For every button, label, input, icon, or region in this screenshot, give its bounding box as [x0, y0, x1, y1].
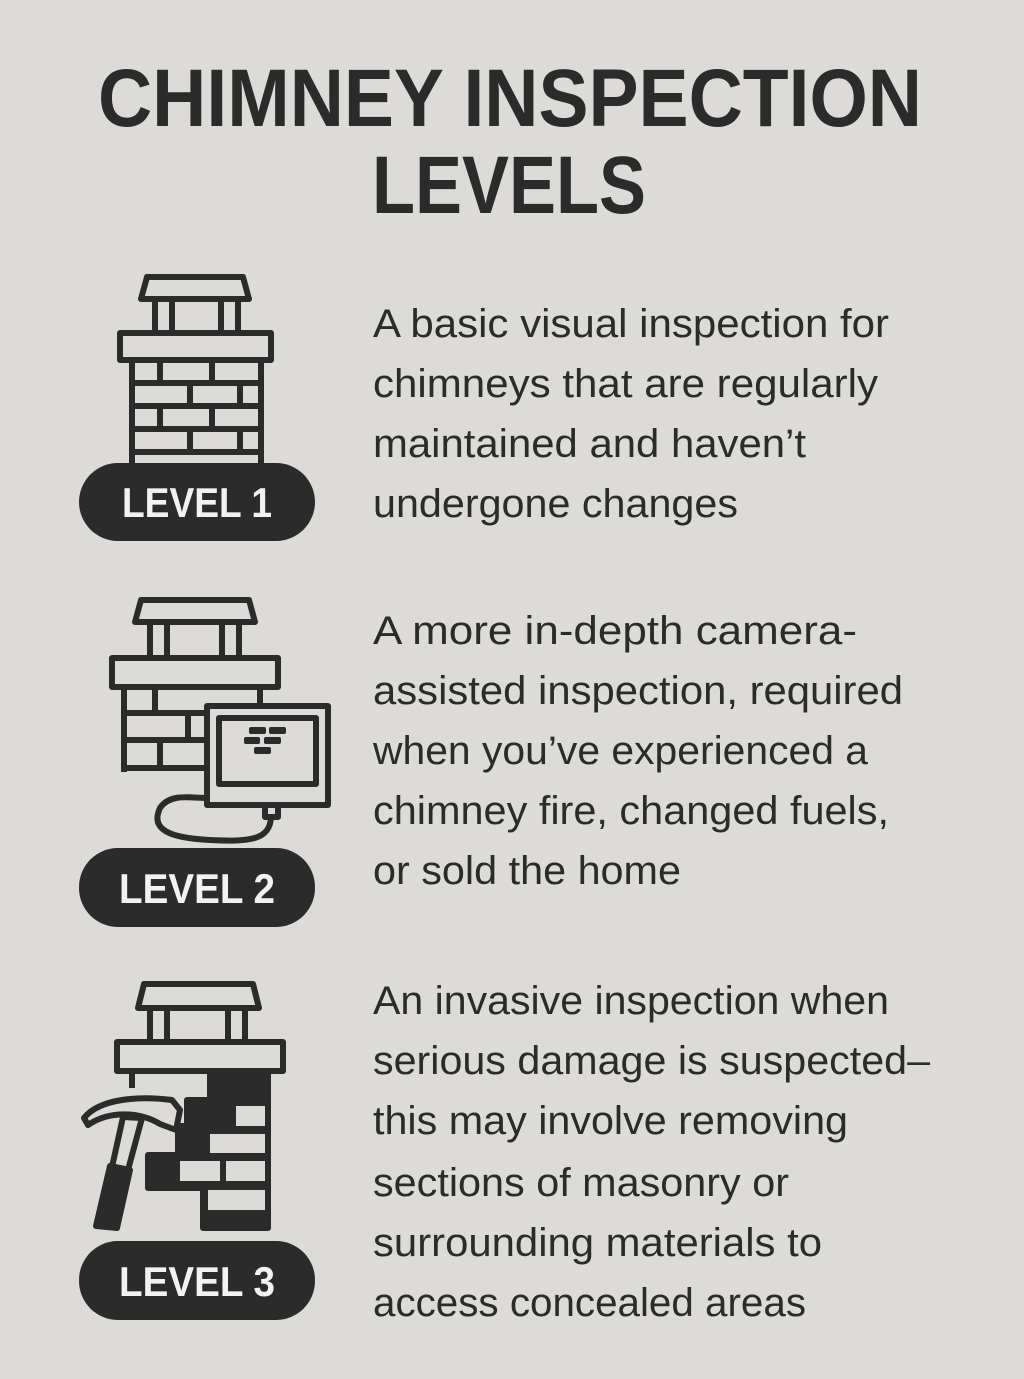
title: CHIMNEY INSPECTION	[98, 53, 922, 144]
text: level 2 description: or sold the home	[373, 849, 681, 893]
text: level 2 description	[372, 609, 903, 893]
icon: chimney level 1	[120, 277, 271, 463]
text: level 3 description: An invasive inspection when	[373, 979, 889, 1023]
text: level 3 description: access concealed areas	[373, 1281, 806, 1325]
title	[98, 53, 922, 231]
badge: level 2	[79, 848, 315, 927]
text: level 2 description: when you’ve experienced a	[372, 729, 869, 773]
text: level 1 description	[373, 302, 889, 526]
panel: level 2	[79, 600, 903, 927]
badge: level 1: LEVEL 1	[122, 479, 272, 526]
badge: level 2: LEVEL 2	[119, 865, 275, 912]
text: level 2 description: A more in-depth camera-	[373, 609, 857, 653]
text: level 3 description: serious damage is suspected–	[373, 1039, 931, 1083]
title: LEVELS	[372, 140, 646, 231]
panel: level 3	[79, 979, 931, 1325]
text: level 3 description	[373, 979, 931, 1325]
icon: screen bricks	[244, 727, 286, 754]
badge: level 3: LEVEL 3	[119, 1258, 275, 1305]
text: level 3 description: sections of masonry or	[373, 1161, 789, 1205]
text: level 1 description: undergone changes	[373, 482, 738, 526]
panel: level 1	[79, 277, 889, 541]
text: level 3 description: this may involve removing	[373, 1099, 848, 1143]
icon: hammer	[84, 1098, 180, 1228]
text: level 2 description: assisted inspection, required	[373, 669, 903, 713]
text: level 1 description: chimneys that are regularly	[373, 362, 878, 406]
text: level 1 description: maintained and haven’t	[373, 422, 806, 466]
text: level 1 description: A basic visual inspection for	[373, 302, 889, 346]
text: level 2 description: chimney fire, changed fuels,	[373, 789, 889, 833]
badge: level 1	[79, 463, 315, 541]
badge: level 3	[79, 1241, 315, 1320]
icon: damaged chimney	[117, 984, 283, 1228]
icon: chimney with camera	[112, 600, 328, 841]
text: level 3 description: surrounding materials to	[373, 1221, 822, 1265]
